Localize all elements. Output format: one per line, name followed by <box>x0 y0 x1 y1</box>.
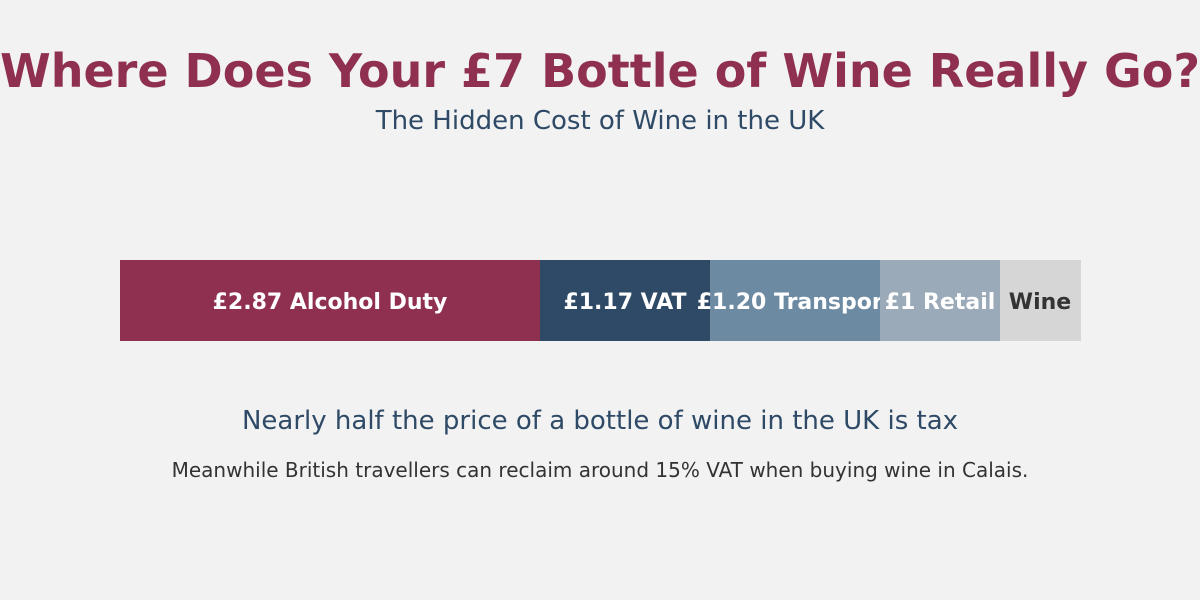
segment: wine: Wine <box>1009 290 1071 315</box>
subtitle: The Hidden Cost of Wine in the UK <box>375 106 825 136</box>
segment: retail <box>880 260 1000 341</box>
segment: VAT <box>540 260 710 341</box>
key message: Nearly half the price of a bottle of wine in the UK is tax <box>242 406 958 436</box>
segment: retail: £1 Retail <box>885 290 995 315</box>
segment: VAT: £1.17 VAT <box>563 290 687 315</box>
footnote: Meanwhile British travellers can reclaim around 15% VAT when buying wine in Calais. <box>172 458 1028 482</box>
segment: wine <box>1000 260 1081 341</box>
segment: transport: £1.20 Transport <box>697 290 894 315</box>
segment: alcohol duty <box>120 260 540 341</box>
stacked bar chart <box>120 260 1081 341</box>
title: Where Does Your £7 Bottle of Wine Really Go? <box>0 44 1200 98</box>
segment: transport <box>697 260 894 341</box>
segment: alcohol duty: £2.87 Alcohol Duty <box>213 290 447 315</box>
